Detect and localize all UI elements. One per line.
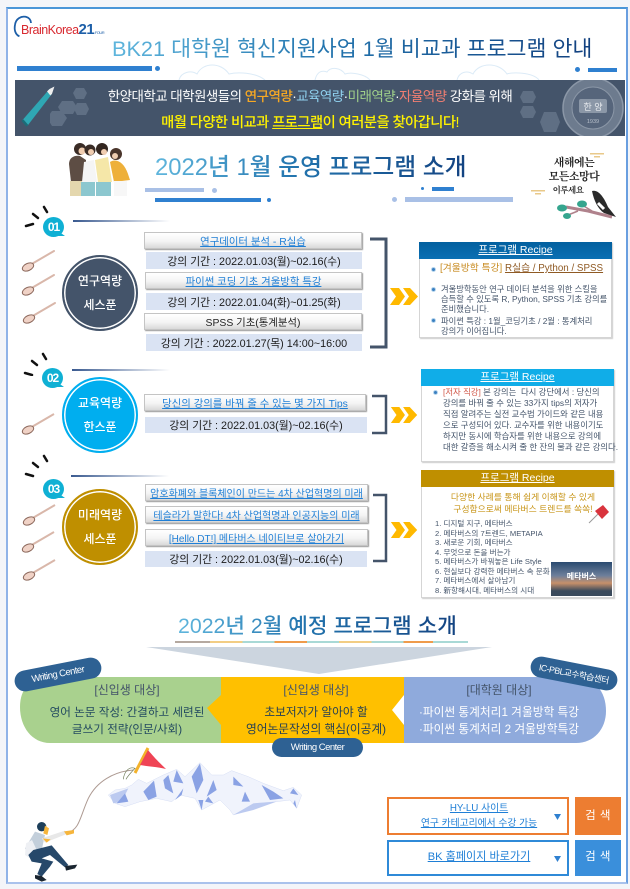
badge 01: 01 [48, 220, 59, 234]
section 01: research [24, 206, 166, 237]
recipe 03 list: 3. 새로운 기회, 메타버스 [435, 538, 513, 547]
section 03: future [24, 454, 165, 499]
recipe 03 list: 2. 메타버스의 7트렌드, METAPIA [435, 528, 543, 538]
search button blue: 검 색 [585, 851, 611, 863]
period 2 [146, 293, 362, 310]
period 3 [146, 334, 362, 351]
recipe 02: 직접 알려주는 실전 교수법 가이드와 같은 내용 [443, 409, 603, 419]
course: tesla [145, 506, 368, 523]
decorative line 03 [71, 475, 169, 477]
rope [68, 770, 133, 833]
badge 02: 02 [47, 371, 58, 385]
course: tips [144, 394, 366, 411]
recipe 03 header: 프로그램 Recipe [480, 472, 555, 484]
funnel triangle [146, 647, 492, 674]
icon: spoon 02 [22, 413, 54, 435]
course: R: 연구데이터 분석 - R실습 [200, 237, 306, 248]
recipe 01 header: 프로그램 Recipe [478, 244, 553, 256]
section 02: teaching [24, 352, 166, 388]
course: metaverse [145, 529, 368, 546]
tag: writing center bottom: Writing Center [291, 742, 344, 753]
blue group text: [대학원 대상] [466, 683, 532, 697]
recipe 01: 습득할 수 있도록 R, Python, SPSS 기초 강의를 [441, 294, 607, 304]
banner text line 1: 한양대학교 대학원생들의 연구역량·교육역량·미래역량·자율역량 강화를 위해 [108, 89, 512, 104]
badge 03 [43, 479, 64, 499]
recipe 03 list [435, 519, 550, 594]
banner [15, 80, 625, 136]
recipe 03 list: 5. 메타버스가 바꿔놓은 Life Style [435, 557, 542, 566]
climber [25, 822, 77, 882]
tag: writing center left [13, 656, 103, 693]
badge 03: 03 [48, 482, 59, 496]
recipe 02 header: 프로그램 Recipe [480, 371, 555, 383]
course: blockchain: 암호화폐와 블록체인이 만드는 4차 산업혁명의 미래 [150, 489, 363, 500]
circle: future spoons [62, 489, 138, 565]
period 2: 강의 기간 : 2022.01.04(화)~01.25(화) [167, 296, 341, 308]
new year calligraphy with magpie [531, 153, 616, 219]
green group text: [신입생 대상] [94, 683, 160, 697]
icon: spoons 01 [22, 250, 56, 324]
course: tips: 당신의 강의를 바꿔 줄 수 있는 몇 가지 Tips [162, 399, 348, 410]
course: R [144, 232, 362, 249]
period: 강의 기간 : 2022.01.03(월)~02.16(수) [169, 420, 343, 432]
bracket 01 [370, 238, 388, 348]
circle: future spoons: 미래역량 [78, 508, 122, 522]
icon: university seal [562, 80, 624, 136]
icon: university seal: 한 양 [583, 102, 603, 112]
green group text [50, 683, 204, 736]
circle: teaching spoon: 한스푼 [83, 420, 117, 434]
recipe 02 header [421, 369, 614, 386]
period [145, 551, 367, 567]
circle: future spoons: 세스푼 [83, 532, 117, 546]
new year calligraphy with magpie: 모든소망다 [549, 168, 599, 184]
bracket 02 [372, 394, 388, 434]
course: python [145, 272, 362, 289]
recipe 01: [겨울방학 특강] R실습 / Python / SPSS [440, 263, 603, 274]
book cover image [551, 562, 612, 596]
recipe 03 lead text: 다양한 사례를 통해 쉽게 이해할 수 있게 [451, 492, 595, 502]
section heading: February: 2022년 2월 예정 프로그램 소개 [178, 614, 457, 638]
yellow group text: [신입생 대상] [283, 683, 349, 697]
recipe 03 list: 7. 메타버스에서 살아남기 [435, 576, 515, 585]
heading decorations [145, 187, 513, 202]
period 3: 강의 기간 : 2022.01.27(목) 14:00~16:00 [161, 338, 347, 350]
course: SPSS: SPSS 기초(통계분석) [206, 318, 300, 329]
link box: HY-LU: HY-LU 사이트 [450, 803, 508, 814]
section heading: January: 2022년 1월 운영 프로그램 소개 [155, 154, 467, 181]
new year calligraphy with magpie: 이루세요 [553, 184, 583, 196]
logo: BrainKorea21 [14, 16, 104, 38]
section heading: February [178, 608, 464, 644]
link box: HY-LU: 연구 카테고리에서 수강 가능 [421, 818, 537, 829]
badge 01 [43, 217, 64, 237]
course: SPSS [144, 313, 362, 330]
green group text: 영어 논문 작성: 간결하고 세련된 [50, 706, 204, 719]
recipe 02: 으로 구성되어 있다. 교수자를 위한 내용이기도 [443, 420, 603, 430]
title [112, 31, 598, 67]
search button blue [575, 840, 621, 876]
recipe 03 [421, 470, 614, 598]
icon: pushpin [588, 505, 609, 524]
icon: university seal: 1939 [587, 119, 599, 125]
dropdown arrow [554, 814, 561, 820]
recipe 03 list: 1. 디지털 지구, 메타버스 [435, 519, 513, 528]
title underline decorations [17, 64, 617, 80]
banner text line 2: 매월 다양한 비교과 프로그램이 여러분을 찾아갑니다! [161, 115, 459, 131]
yellow group text: 초보저자가 알아야 할 [264, 706, 368, 719]
arrow 03 [390, 522, 418, 538]
illustration: climber, rope, flag and mountains [25, 747, 302, 882]
new year calligraphy with magpie: 새해에는 [554, 154, 594, 170]
tag: writing center left: Writing Center [31, 664, 85, 685]
yellow group text [246, 683, 386, 736]
icon: tick marks 03 [24, 454, 48, 478]
decorative line 01 [73, 220, 170, 222]
period [145, 417, 367, 433]
multicolor underline [175, 641, 468, 643]
recipe 03 lead text: 구성함으로써 메타버스 트렌드를 쏙쏙! [453, 504, 593, 514]
hexagon decorations [50, 88, 89, 126]
circle: teaching spoon [62, 377, 138, 453]
period 1: 강의 기간 : 2022.01.03(월)~02.16(수) [167, 256, 341, 268]
course: tesla: 테슬라가 말한다! 4차 산업혁명과 인공지능의 미래 [153, 511, 360, 522]
blue group text: ·파이썬 통계처리1 겨울방학 특강 [419, 706, 579, 719]
course: metaverse: [Hello DT!] 메타버스 네이티브로 살아가기 [169, 534, 344, 545]
section heading: January [155, 148, 475, 188]
recipe 03 header [421, 470, 614, 487]
recipe 01 [419, 242, 612, 338]
recipe 02 [421, 369, 614, 462]
period: 강의 기간 : 2022.01.03(월)~02.16(수) [169, 554, 343, 566]
course: blockchain [145, 484, 368, 501]
badge 02 [42, 368, 63, 388]
recipe 01: 겨울방학동안 연구 데이터 분석을 위한 스킬을 [441, 284, 598, 294]
search button orange: 검 색 [585, 810, 611, 822]
flag [135, 748, 166, 773]
recipe 02: [저자 직강] 본 강의는 다시 강단에서 : 당신의 [443, 387, 600, 397]
circle: teaching spoon: 교육역량 [78, 396, 122, 410]
circle: research spoons [62, 255, 138, 331]
recipe 03 lead text [451, 492, 595, 514]
recipe 01: 강의가 이어집니다. [441, 326, 507, 336]
icon: spoons 03 [22, 504, 56, 581]
icon: pencil [22, 86, 54, 126]
course: python: 파이썬 코딩 기초 겨울방학 특강 [186, 277, 321, 288]
green group text: 글쓰기 전략(인문/사회) [72, 723, 182, 736]
recipe 01: 파이썬 특강 : 1월_코딩기초 / 2월 : 통계처리 [441, 316, 592, 326]
recipe 02: 강의를 바꿔 줄 수 있는 33가지 tips의 저자가 [443, 398, 597, 408]
recipe 03 list: 4. 무엇으로 돈을 버는가 [435, 548, 511, 556]
dropdown arrow [554, 856, 561, 862]
link box: HY-LU [387, 797, 569, 835]
mountains [108, 763, 302, 815]
link box: BK homepage [387, 840, 569, 876]
yellow group text: 영어논문작성의 핵심(이공계) [246, 723, 386, 736]
period 1 [146, 252, 362, 269]
link box: BK homepage: BK 홈페이지 바로가기 [428, 851, 530, 863]
search button orange [575, 797, 621, 835]
blue group text [419, 683, 579, 736]
bracket 03 [373, 494, 388, 562]
tag: writing center bottom [272, 738, 363, 757]
circle: research spoons: 연구역량 [78, 274, 122, 288]
recipe 02: 대한 갈증을 해소시켜 줄 한 잔의 물과 같은 강의다. [443, 442, 618, 452]
blue group text: ·파이썬 통계처리 2 겨울방학특강 [419, 723, 579, 736]
icon: tick marks 01 [24, 206, 48, 228]
title: BK21 대학원 혁신지원사업 1월 비교과 프로그램 안내 [112, 36, 592, 61]
recipe 02: 하지만 동시에 학습자를 위한 내용으로 강의에 [443, 431, 601, 441]
recipe 01: 준비했습니다. [441, 304, 489, 314]
tag: IC-PBL [529, 655, 619, 692]
recipe 01 header [419, 242, 612, 259]
illustration: students [69, 143, 130, 196]
book cover image: 메타버스 [567, 572, 596, 581]
logo: BrainKorea21: BrainKorea21 FOUR [21, 21, 104, 38]
recipe 03 list: 6. 현실보다 강력한 메타버스 속 문화 [435, 566, 550, 576]
arrow 01 [390, 288, 418, 305]
target groups band [20, 677, 606, 743]
circle: research spoons: 세스푼 [83, 298, 117, 312]
recipe 03 list: 8. 新항해시대, 메타버스의 시대 [435, 586, 534, 594]
arrow 02 [390, 407, 418, 423]
decorative line 02 [72, 369, 170, 371]
icon: tick marks 02 [24, 352, 48, 376]
tag: IC-PBL: IC-PBL교수학습센터 [538, 662, 610, 686]
